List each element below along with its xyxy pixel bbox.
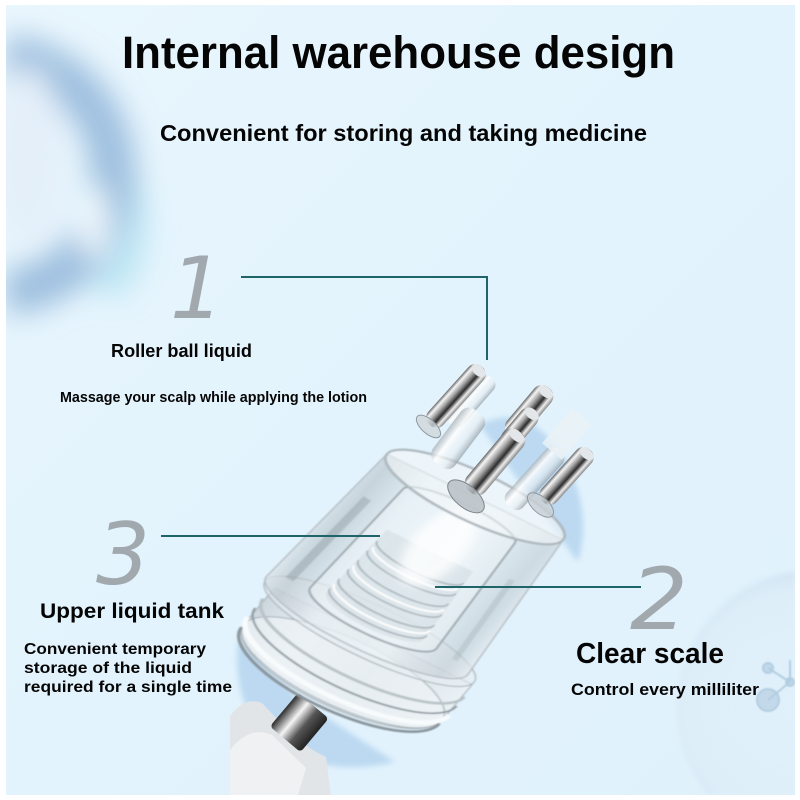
description 3: required for a single time xyxy=(24,679,232,696)
metal stem xyxy=(270,693,329,752)
description 2: Control every milliliter xyxy=(571,681,760,699)
callout 2: clear scale xyxy=(435,550,760,699)
clear pins xyxy=(431,376,566,510)
heading 3: Upper liquid tank xyxy=(40,599,224,623)
top disc xyxy=(384,448,567,546)
heading 1: Roller ball liquid xyxy=(111,340,252,361)
leader line 3 xyxy=(161,535,380,537)
clear roller head xyxy=(236,448,567,734)
outer transparent cylinder xyxy=(264,454,562,680)
subtitle: Convenient for storing and taking medicine xyxy=(160,120,647,146)
leader line 2 xyxy=(435,586,641,588)
callout 3: upper liquid tank xyxy=(24,505,380,696)
decorative blurred bubble: left xyxy=(0,58,148,297)
product: roller applicator xyxy=(230,364,594,795)
number 3: 3 xyxy=(96,505,150,605)
description 3: Convenient temporary xyxy=(24,641,206,658)
description 1: Massage your scalp while applying the lotion xyxy=(60,390,367,406)
metal rollers xyxy=(416,364,594,518)
inner liquid tank with scale xyxy=(286,486,518,660)
product backdrop bubble crescents xyxy=(237,417,583,767)
white bottle xyxy=(230,701,331,795)
callout 1: roller ball liquid xyxy=(60,239,487,406)
number 2: 2 xyxy=(630,550,688,650)
heading 2: Clear scale xyxy=(576,638,724,670)
description 3 xyxy=(24,641,232,696)
title: Internal warehouse design xyxy=(122,27,675,78)
base collars xyxy=(236,576,477,734)
number 1: 1 xyxy=(170,239,224,339)
description 3: storage of the liquid xyxy=(24,660,192,677)
decorative molecule bubble: right xyxy=(740,573,795,712)
leader line 1 xyxy=(241,277,487,360)
